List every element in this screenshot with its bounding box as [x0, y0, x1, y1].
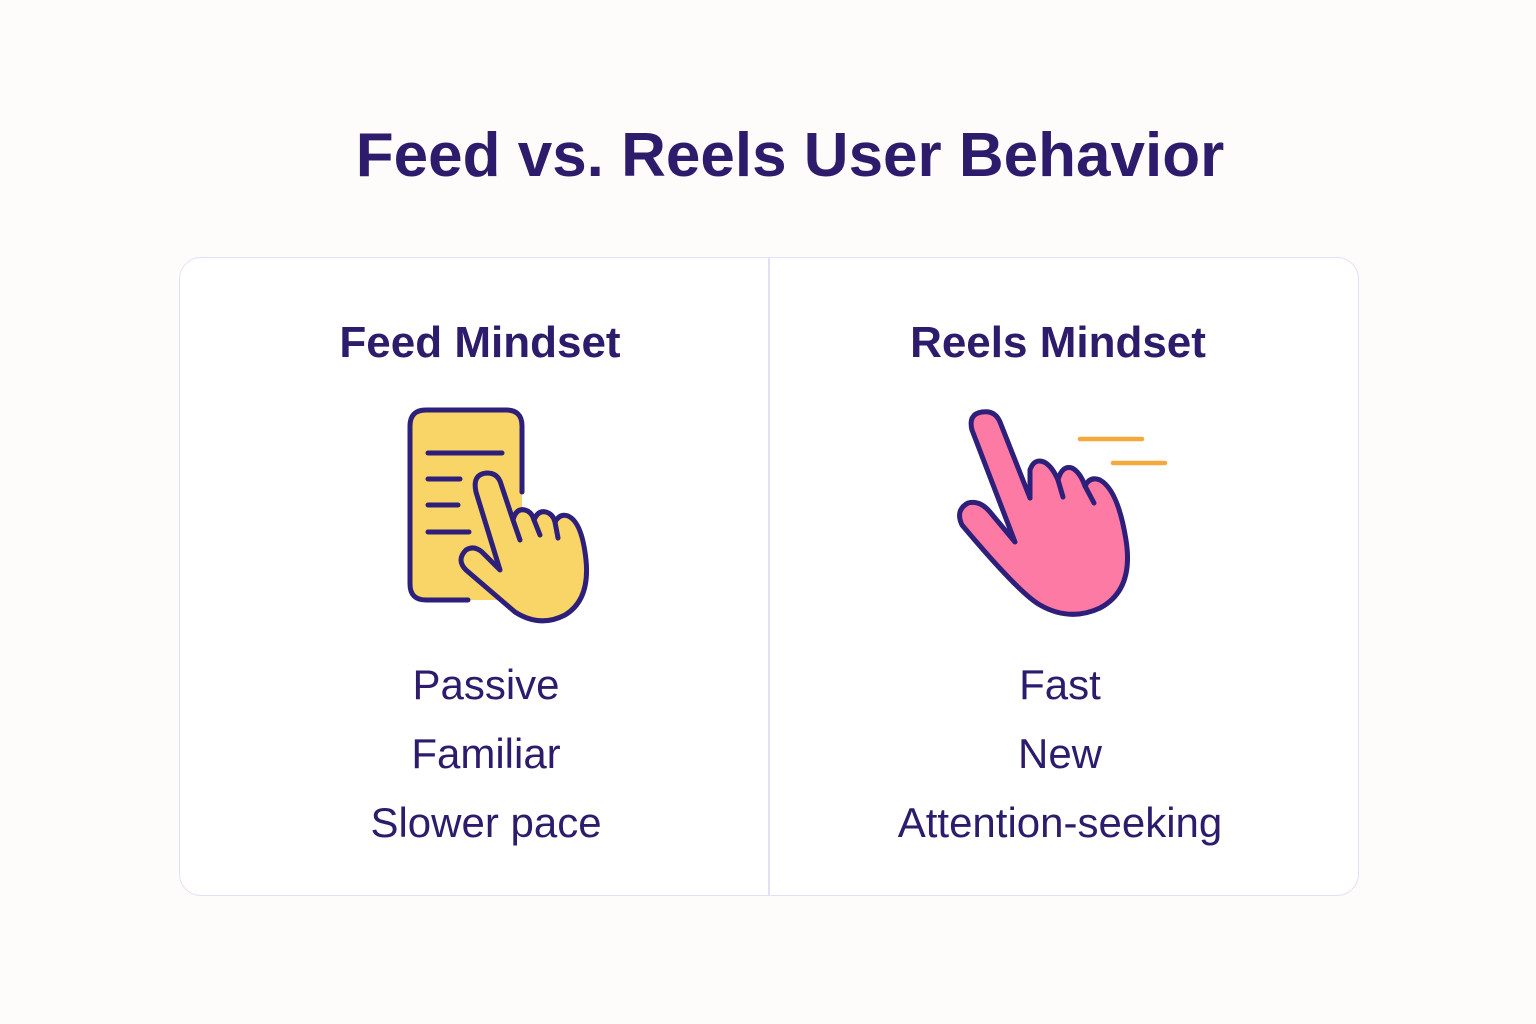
- heading: feed mindset: Feed Mindset: [339, 318, 621, 367]
- icon: phone with tapping hand: [410, 410, 587, 621]
- heading: reels mindset: Reels Mindset: [910, 318, 1206, 367]
- list: feed traits: Familiar: [411, 730, 561, 777]
- icon: swiping hand: [960, 412, 1165, 614]
- list: reels traits: [898, 661, 1222, 846]
- list: feed traits: [370, 661, 602, 846]
- list: feed traits: Passive: [412, 661, 560, 708]
- list: feed traits: Slower pace: [370, 799, 602, 846]
- title: Feed vs. Reels User Behavior: [356, 121, 1224, 190]
- list: reels traits: New: [1018, 730, 1102, 777]
- list: reels traits: Attention-seeking: [898, 799, 1222, 846]
- list: reels traits: Fast: [1019, 661, 1101, 708]
- comparison card: [179, 257, 1359, 896]
